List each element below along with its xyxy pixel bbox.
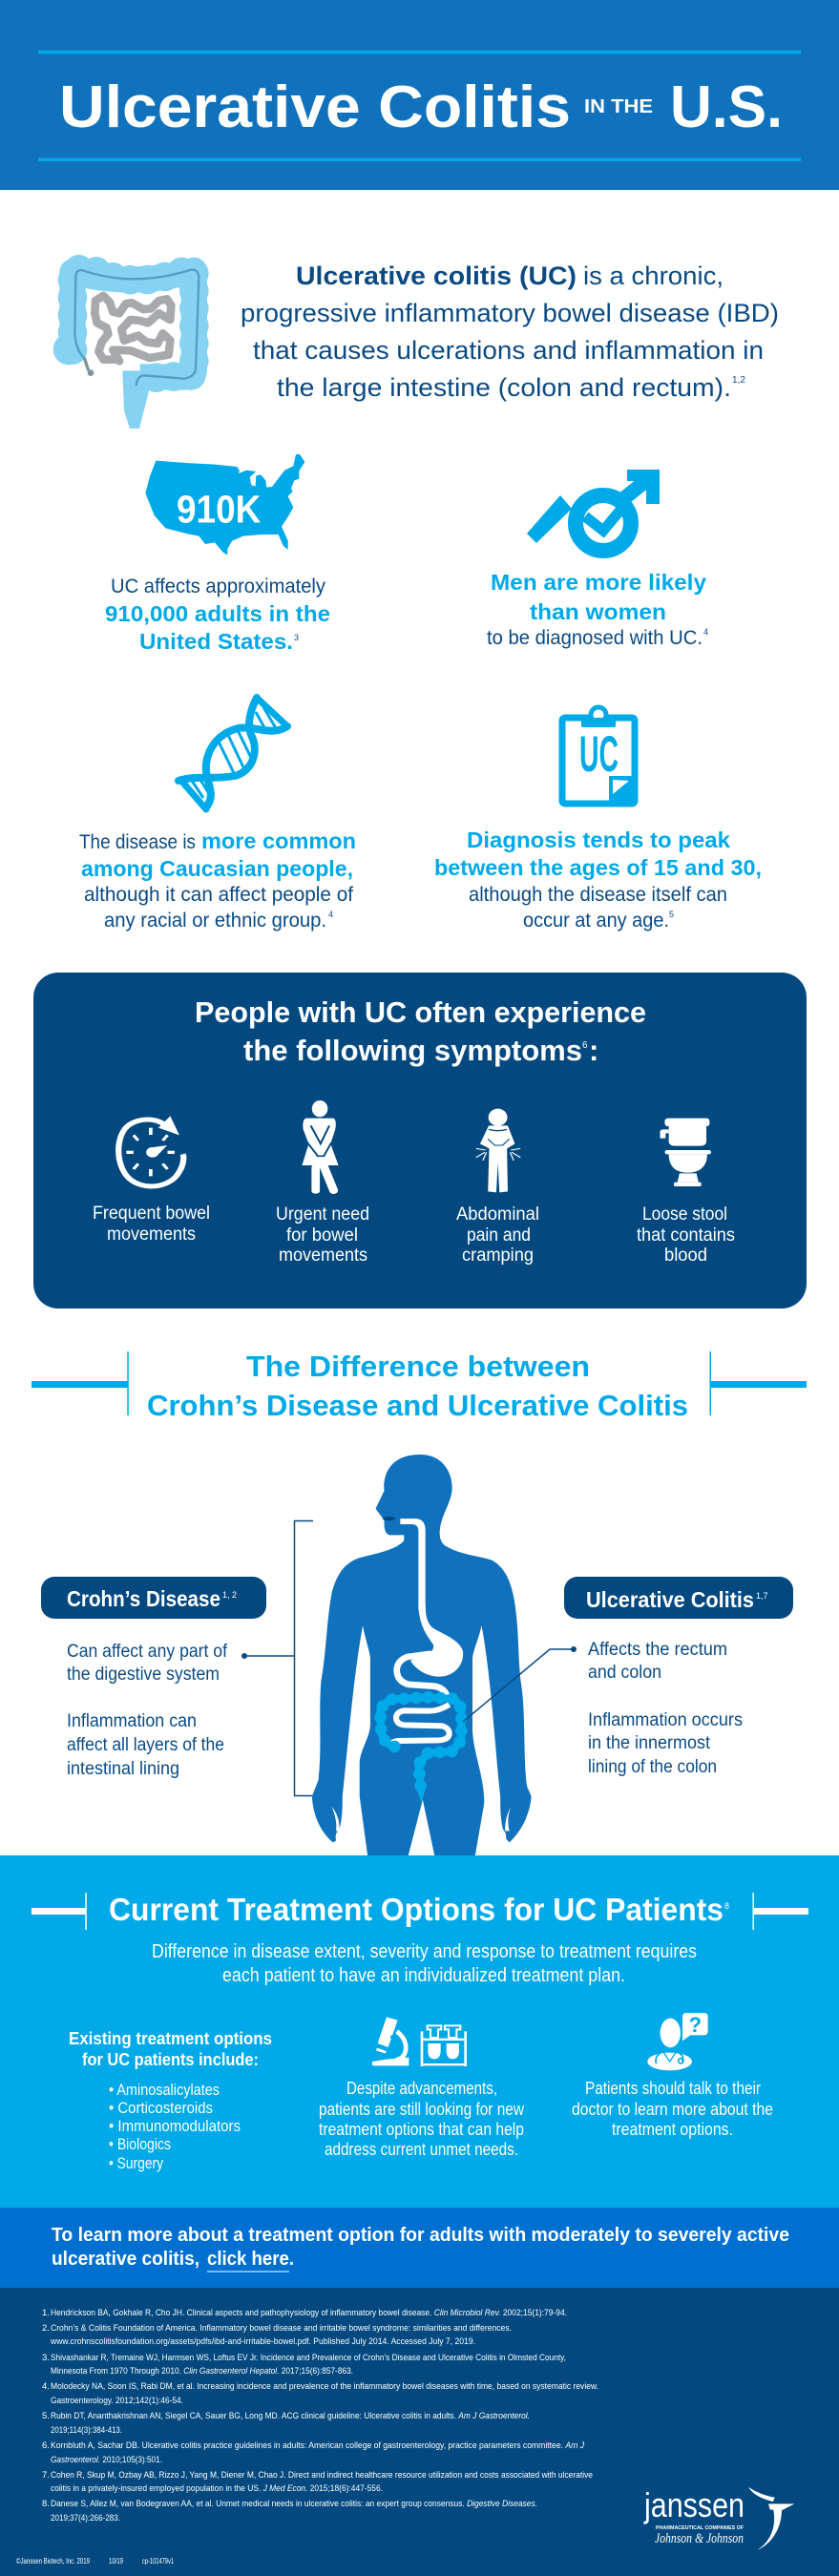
panel: Crohn's Disease [41, 1577, 266, 1619]
footer [0, 2288, 839, 2576]
text: Crohn's Disease details: Can affect any part of [67, 1642, 228, 1662]
references: 2019;114(3):384-413. [51, 2425, 122, 2436]
stat: Caucasian people: although it can affect people of [84, 884, 353, 906]
stat: men more likely: than women [530, 599, 666, 624]
stat: men more likely: 4 [703, 627, 708, 637]
stat: diagnosis age peak [434, 707, 762, 932]
existing treatment list: Existing treatment options [69, 2029, 272, 2048]
stat: Caucasian people: any racial or ethnic group. [104, 910, 326, 932]
references: Molodecky NA, Soon IS, Rabi DM, et al. Increasing incidence and prevalence of the inflammatory bowel diseases with time, based on systematic review. [51, 2381, 598, 2392]
references: Hendrickson BA, Gokhale R, Cho JH. Clinical aspects and pathophysiology of inflammatory bowel disease. Clin Microbiol Rev. 2002;15(1):79-94. [51, 2308, 567, 2318]
label: abdominal pain and cramping: pain and [467, 1225, 531, 1246]
icon: clipboard with UC: UC [579, 726, 619, 783]
treatment intro text [152, 1941, 697, 1986]
symptoms heading: People with UC often experience [195, 995, 646, 1029]
text: Ulcerative Colitis details: Affects the rectum [588, 1640, 727, 1660]
symptoms heading: 6 [582, 1040, 588, 1051]
label: frequent bowel movements [93, 1204, 210, 1245]
text: patients should talk [572, 2079, 773, 2139]
copyright line [16, 2557, 174, 2566]
intro text: progressive inflammatory bowel disease (IBD) [241, 299, 779, 327]
label: loose stool [637, 1204, 735, 1266]
panel: symptoms [33, 973, 807, 1309]
references: 2. [42, 2323, 50, 2334]
logo: Janssen: janssen [643, 2485, 745, 2524]
references: 1. [42, 2308, 50, 2318]
label: urgent need: for bowel [286, 1225, 358, 1246]
copyright line: cp-101479v1 [142, 2557, 174, 2566]
icon: clock with arrow [118, 1116, 186, 1186]
intro text: that causes ulcerations and inflammation in [253, 336, 764, 365]
symptoms heading: the following symptoms [243, 1034, 582, 1067]
intro text [241, 262, 779, 402]
icon: microscope and test tubes [372, 2017, 467, 2066]
symptoms heading [195, 995, 646, 1067]
stat: 910K adults: UC affects approximately [111, 576, 325, 597]
label: urgent need: Urgent need [276, 1204, 369, 1225]
symptoms heading: : [589, 1034, 598, 1067]
text: despite advancements [319, 2079, 525, 2159]
heading: the difference [31, 1350, 807, 1422]
icon: toilet [661, 1119, 711, 1186]
text: Ulcerative Colitis details: Inflammation occurs [588, 1710, 743, 1730]
logo: Janssen: PHARMACEUTICAL COMPANIES OF [656, 2525, 745, 2531]
stat: 910K adults: 910,000 adults in the [105, 601, 330, 626]
existing treatment list: • Surgery [109, 2154, 163, 2172]
stat: men more likely: to be diagnosed with UC. [487, 627, 703, 649]
stat: diagnosis age peak: occur at any age. [523, 910, 669, 932]
intro text: is a chronic, [583, 262, 724, 290]
references: colitis in a privately-insured employed population in the US. J Med Econ. 2015;18(6):447-556. [51, 2483, 383, 2494]
text: despite advancements: address current unmet needs. [325, 2140, 518, 2159]
label: loose stool: blood [664, 1246, 707, 1266]
title: Ulcerative Colitis [59, 74, 571, 140]
label: urgent need [276, 1204, 369, 1266]
label: abdominal pain and cramping [456, 1204, 539, 1266]
call to action banner: To learn more about a treatment option for adults with moderately to severely active [52, 2225, 789, 2246]
references: www.crohnscolitisfoundation.org/assets/pdfs/ibd-and-irritable-bowel.pdf. Published July 2014. Accessed July 7, 2019. [50, 2336, 475, 2347]
icon: US map with 910K: 910K [177, 487, 261, 531]
text: despite advancements: patients are still looking for new [319, 2100, 525, 2119]
icon: doctor with question bubble [647, 2013, 708, 2070]
references: 3. [42, 2353, 50, 2363]
references [42, 2308, 598, 2524]
text: despite advancements: Despite advancements, [346, 2079, 497, 2098]
stat: diagnosis age peak: although the disease itself can [469, 884, 727, 906]
heading: the difference: The Difference between [246, 1350, 590, 1383]
treatment intro text: each patient to have an individualized treatment plan. [222, 1965, 625, 1986]
title: U.S. [670, 74, 783, 140]
text: patients should talk: doctor to learn more about the [572, 2100, 773, 2119]
digestive tract [380, 1603, 463, 1802]
icon: woman with urgent need [302, 1100, 339, 1194]
text: Ulcerative Colitis details [588, 1640, 743, 1777]
references: 7. [42, 2470, 50, 2481]
icon: clipboard with UC [562, 707, 635, 804]
panel: Crohn's Disease: 1, 2 [222, 1590, 237, 1600]
label: abdominal pain and cramping: cramping [462, 1246, 534, 1266]
label: urgent need: movements [279, 1246, 367, 1266]
stat: diagnosis age peak: between the ages of 15 and 30, [434, 855, 762, 880]
text: Ulcerative Colitis details: lining of the colon [588, 1757, 717, 1777]
call to action banner [0, 2208, 839, 2288]
text: Ulcerative Colitis details: and colon [588, 1663, 661, 1683]
pointer: Crohn's dot [241, 1653, 247, 1659]
label: abdominal pain and cramping: Abdominal [456, 1204, 539, 1225]
icon: person with abdominal pain [476, 1109, 520, 1192]
existing treatment list [69, 2029, 272, 2172]
treatment intro text: Difference in disease extent, severity and response to treatment requires [152, 1941, 697, 1962]
title [59, 74, 783, 140]
stat: Caucasian people: more common [201, 828, 356, 853]
panel: Ulcerative Colitis: 1,7 [756, 1591, 768, 1601]
label: loose stool: that contains [637, 1225, 735, 1246]
label: frequent bowel movements: movements [107, 1225, 196, 1245]
references: 8. [42, 2499, 50, 2509]
treatment heading: Current Treatment Options for UC Patients [109, 1892, 724, 1927]
references: Shivashankar R, Tremaine WJ, Harmsen WS, Loftus EV Jr. Incidence and Prevalence of Crohn’s Disease and Ulcerative Colitis in Olmsted County, [51, 2353, 566, 2363]
copyright line: 10/19 [109, 2557, 123, 2566]
text: patients should talk: Patients should talk to their [585, 2079, 761, 2098]
references: 4. [42, 2381, 50, 2392]
references: Crohn’s & Colitis Foundation of America. Inflammatory bowel disease and irritable bowel syndrome: similarities and differences. [51, 2323, 512, 2334]
text: Crohn's Disease details: intestinal lining [67, 1759, 179, 1779]
header banner [0, 0, 839, 190]
stat: Caucasian people: The disease is [79, 831, 196, 853]
icon: DNA helix [178, 698, 287, 809]
pointer: colon line [463, 1646, 577, 1722]
icon: US map with 910K [145, 454, 304, 555]
treatment heading: 8 [724, 1901, 729, 1911]
stat: Caucasian people: among Caucasian people, [81, 856, 353, 881]
label: frequent bowel movements: Frequent bowel [93, 1204, 210, 1224]
stat: 910K adults: 3 [294, 633, 299, 642]
stat: diagnosis age peak: Diagnosis tends to peak [467, 827, 730, 852]
stat: 910K adults [105, 454, 330, 654]
icon: colon and small intestine [53, 269, 199, 429]
logo: Janssen: Johnson & Johnson [655, 2531, 744, 2546]
references: 6. [42, 2440, 50, 2451]
existing treatment list: • Immunomodulators [109, 2117, 241, 2135]
references: Gastroenterology. 2012;142(1):46-54. [51, 2396, 183, 2406]
text: Crohn's Disease details: Inflammation can [67, 1711, 197, 1731]
stat: diagnosis age peak: 5 [669, 910, 674, 919]
references: Cohen R, Skup M, Ozbay AB, Rizzo J, Yang M, Diener M, Chao J. Direct and indirect healthcare resource utilization and costs associated with ulcerative [51, 2470, 593, 2481]
stat: Caucasian people [79, 698, 356, 932]
title: IN THE [584, 96, 653, 117]
human body illustration [312, 1455, 532, 1855]
call to action banner: click here. [207, 2249, 294, 2270]
existing treatment list: • Aminosalicylates [109, 2081, 220, 2099]
heading: the difference: Crohn’s Disease and Ulcerative Colitis [147, 1389, 688, 1422]
references: 2019;37(4):266-283. [51, 2513, 120, 2524]
text: despite advancements: treatment options that can help [319, 2120, 524, 2139]
label: loose stool: Loose stool [642, 1204, 727, 1225]
call to action banner: ulcerative colitis, [52, 2249, 199, 2270]
stat: Caucasian people: 4 [328, 910, 333, 919]
stat: men more likely [487, 470, 708, 649]
panel: Ulcerative Colitis: Ulcerative Colitis [586, 1587, 754, 1612]
references: Rubin DT, Ananthakrishnan AN, Siegel CA, Sauer BG, Long MD. ACG clinical guideline: Ulcerative colitis in adults. Am J Gastroenterol. [51, 2411, 530, 2421]
copyright line: ©Janssen Biotech, Inc. 2019 [16, 2557, 90, 2566]
existing treatment list: • Biologics [109, 2135, 171, 2153]
panel: Crohn's Disease: Crohn’s Disease [67, 1586, 220, 1611]
panel: Ulcerative Colitis [564, 1577, 793, 1619]
logo: Janssen [643, 2485, 794, 2550]
stat: men more likely: Men are more likely [491, 570, 706, 595]
references: Gastroenterol. 2010;105(3):501. [51, 2455, 162, 2465]
text: Ulcerative Colitis details: in the innermost [588, 1733, 711, 1753]
text: Crohn's Disease details [67, 1642, 228, 1779]
stat: 910K adults: United States. [139, 629, 293, 654]
icon: male symbol with check mark [527, 470, 660, 551]
references: 5. [42, 2411, 50, 2421]
text: patients should talk: treatment options. [612, 2120, 733, 2139]
bracket: Crohn's extent [244, 1521, 313, 1796]
intro text: the large intestine (colon and rectum). [277, 373, 731, 402]
intro text: 1,2 [732, 375, 745, 386]
panel: treatment options [0, 1855, 839, 2208]
existing treatment list: • Corticosteroids [109, 2099, 213, 2117]
icon: doctor with question bubble: ? [689, 2013, 702, 2037]
text: Crohn's Disease details: the digestive system [67, 1665, 220, 1685]
references: Minnesota From 1970 Through 2010. Clin Gastroenterol Hepatol. 2017;15(6):857-863. [51, 2366, 353, 2377]
references: Kornbluth A, Sachar DB. Ulcerative colitis practice guidelines in adults: American college of gastroenterology, practice parameters committee. Am J [51, 2440, 584, 2451]
references: Danese S, Allez M, van Bodegraven AA, et al. Unmet medical needs in ulcerative colitis: an expert group consensus. Digestive Diseases. [51, 2499, 537, 2509]
intro text: Ulcerative colitis (UC) [296, 262, 577, 290]
existing treatment list: for UC patients include: [82, 2050, 259, 2069]
text: Crohn's Disease details: affect all layers of the [67, 1735, 224, 1755]
